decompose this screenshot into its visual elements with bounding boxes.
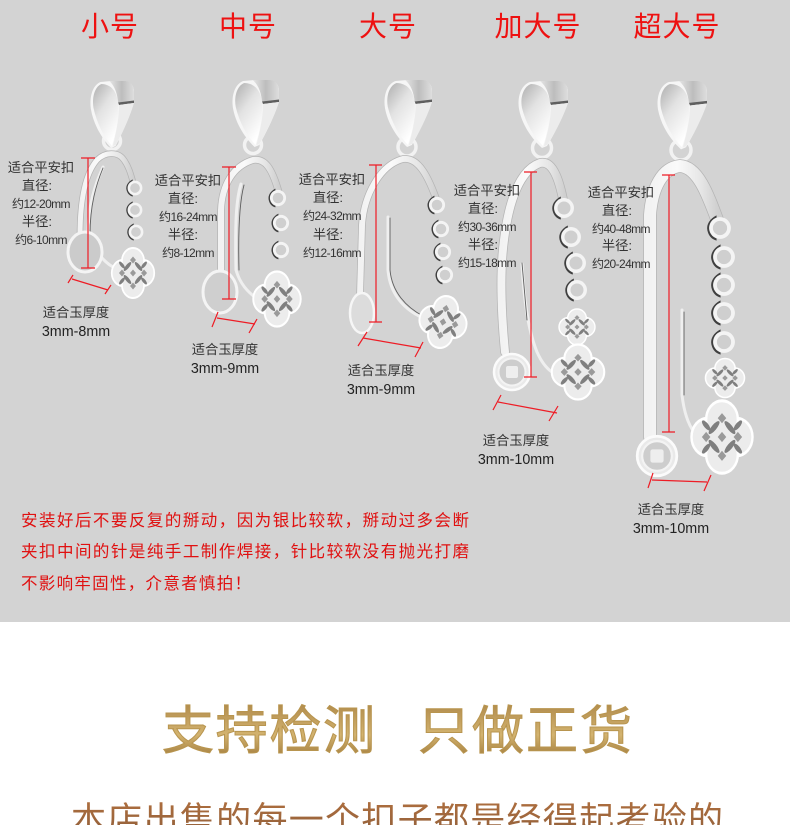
clasp: large bbox=[350, 80, 472, 353]
labels: extra extra large: 适合平安扣 bbox=[588, 185, 654, 200]
clasp: medium bbox=[203, 80, 301, 326]
labels: extra large: 3mm-10mm bbox=[478, 452, 554, 468]
labels: extra large: 约15-18mm bbox=[458, 255, 517, 270]
labels: extra extra large: 半径: bbox=[602, 238, 632, 253]
size headings: 大号 bbox=[359, 11, 417, 42]
red notice text bbox=[21, 511, 469, 593]
labels: large: 约24-32mm bbox=[303, 208, 362, 223]
labels: medium: 半径: bbox=[168, 227, 198, 242]
size headings: 小号 bbox=[81, 11, 139, 42]
red notice text: 夹扣中间的针是纯手工制作焊接，针比较软没有抛光打磨 bbox=[21, 542, 469, 561]
labels: small bbox=[8, 160, 110, 340]
labels: medium: 约16-24mm bbox=[159, 209, 218, 224]
labels: large: 3mm-9mm bbox=[347, 382, 415, 398]
labels: small: 3mm-8mm bbox=[42, 324, 110, 340]
labels: extra extra large bbox=[588, 185, 709, 537]
labels: medium bbox=[155, 173, 259, 377]
red notice text: 安装好后不要反复的掰动，因为银比较软，掰动过多会断 bbox=[21, 511, 469, 530]
gold heading: 只做正货 bbox=[418, 703, 632, 761]
clasp: small bbox=[68, 81, 154, 298]
labels: medium: 适合平安扣 bbox=[155, 173, 221, 188]
labels: small: 适合玉厚度 bbox=[43, 305, 109, 320]
labels: small: 适合平安扣 bbox=[8, 160, 74, 175]
clasp: extra large bbox=[494, 81, 604, 400]
labels: large bbox=[299, 172, 415, 398]
labels: extra large: 半径: bbox=[468, 237, 498, 252]
gold heading bbox=[162, 703, 632, 761]
labels: large: 适合平安扣 bbox=[299, 172, 365, 187]
labels: extra large: 直径: bbox=[468, 201, 498, 216]
labels: large: 约12-16mm bbox=[303, 245, 362, 260]
gold heading: 支持检测 bbox=[162, 703, 375, 761]
labels: large: 适合玉厚度 bbox=[348, 363, 414, 378]
labels: extra extra large: 约20-24mm bbox=[592, 256, 651, 271]
labels: small: 直径: bbox=[22, 178, 52, 193]
red notice text: 不影响牢固性，介意者慎拍！ bbox=[21, 574, 251, 593]
labels: medium: 适合玉厚度 bbox=[192, 342, 258, 357]
labels: extra extra large: 约40-48mm bbox=[592, 221, 651, 236]
labels: extra extra large: 直径: bbox=[602, 203, 632, 218]
labels: extra large bbox=[454, 183, 554, 468]
labels: medium: 直径: bbox=[168, 191, 198, 206]
labels: small: 约12-20mm bbox=[12, 196, 71, 211]
labels: extra large: 适合玉厚度 bbox=[483, 433, 549, 448]
labels: medium: 3mm-9mm bbox=[191, 361, 259, 377]
size headings: 超大号 bbox=[633, 11, 721, 42]
size headings: 中号 bbox=[219, 11, 277, 42]
red measurement lines bbox=[68, 158, 711, 491]
clasp: extra extra large bbox=[637, 81, 752, 476]
size headings bbox=[81, 11, 721, 42]
labels: medium: 约8-12mm bbox=[162, 245, 215, 260]
labels: large: 半径: bbox=[313, 227, 343, 242]
labels: extra extra large: 适合玉厚度 bbox=[638, 502, 704, 517]
labels: large: 直径: bbox=[313, 190, 343, 205]
labels: small: 半径: bbox=[22, 214, 52, 229]
labels: extra extra large: 3mm-10mm bbox=[633, 521, 709, 537]
size headings: 加大号 bbox=[494, 11, 582, 42]
labels: extra large: 约30-36mm bbox=[458, 219, 517, 234]
labels: extra large: 适合平安扣 bbox=[454, 183, 520, 198]
grey background panel bbox=[0, 0, 790, 622]
labels: small: 约6-10mm bbox=[15, 232, 68, 247]
